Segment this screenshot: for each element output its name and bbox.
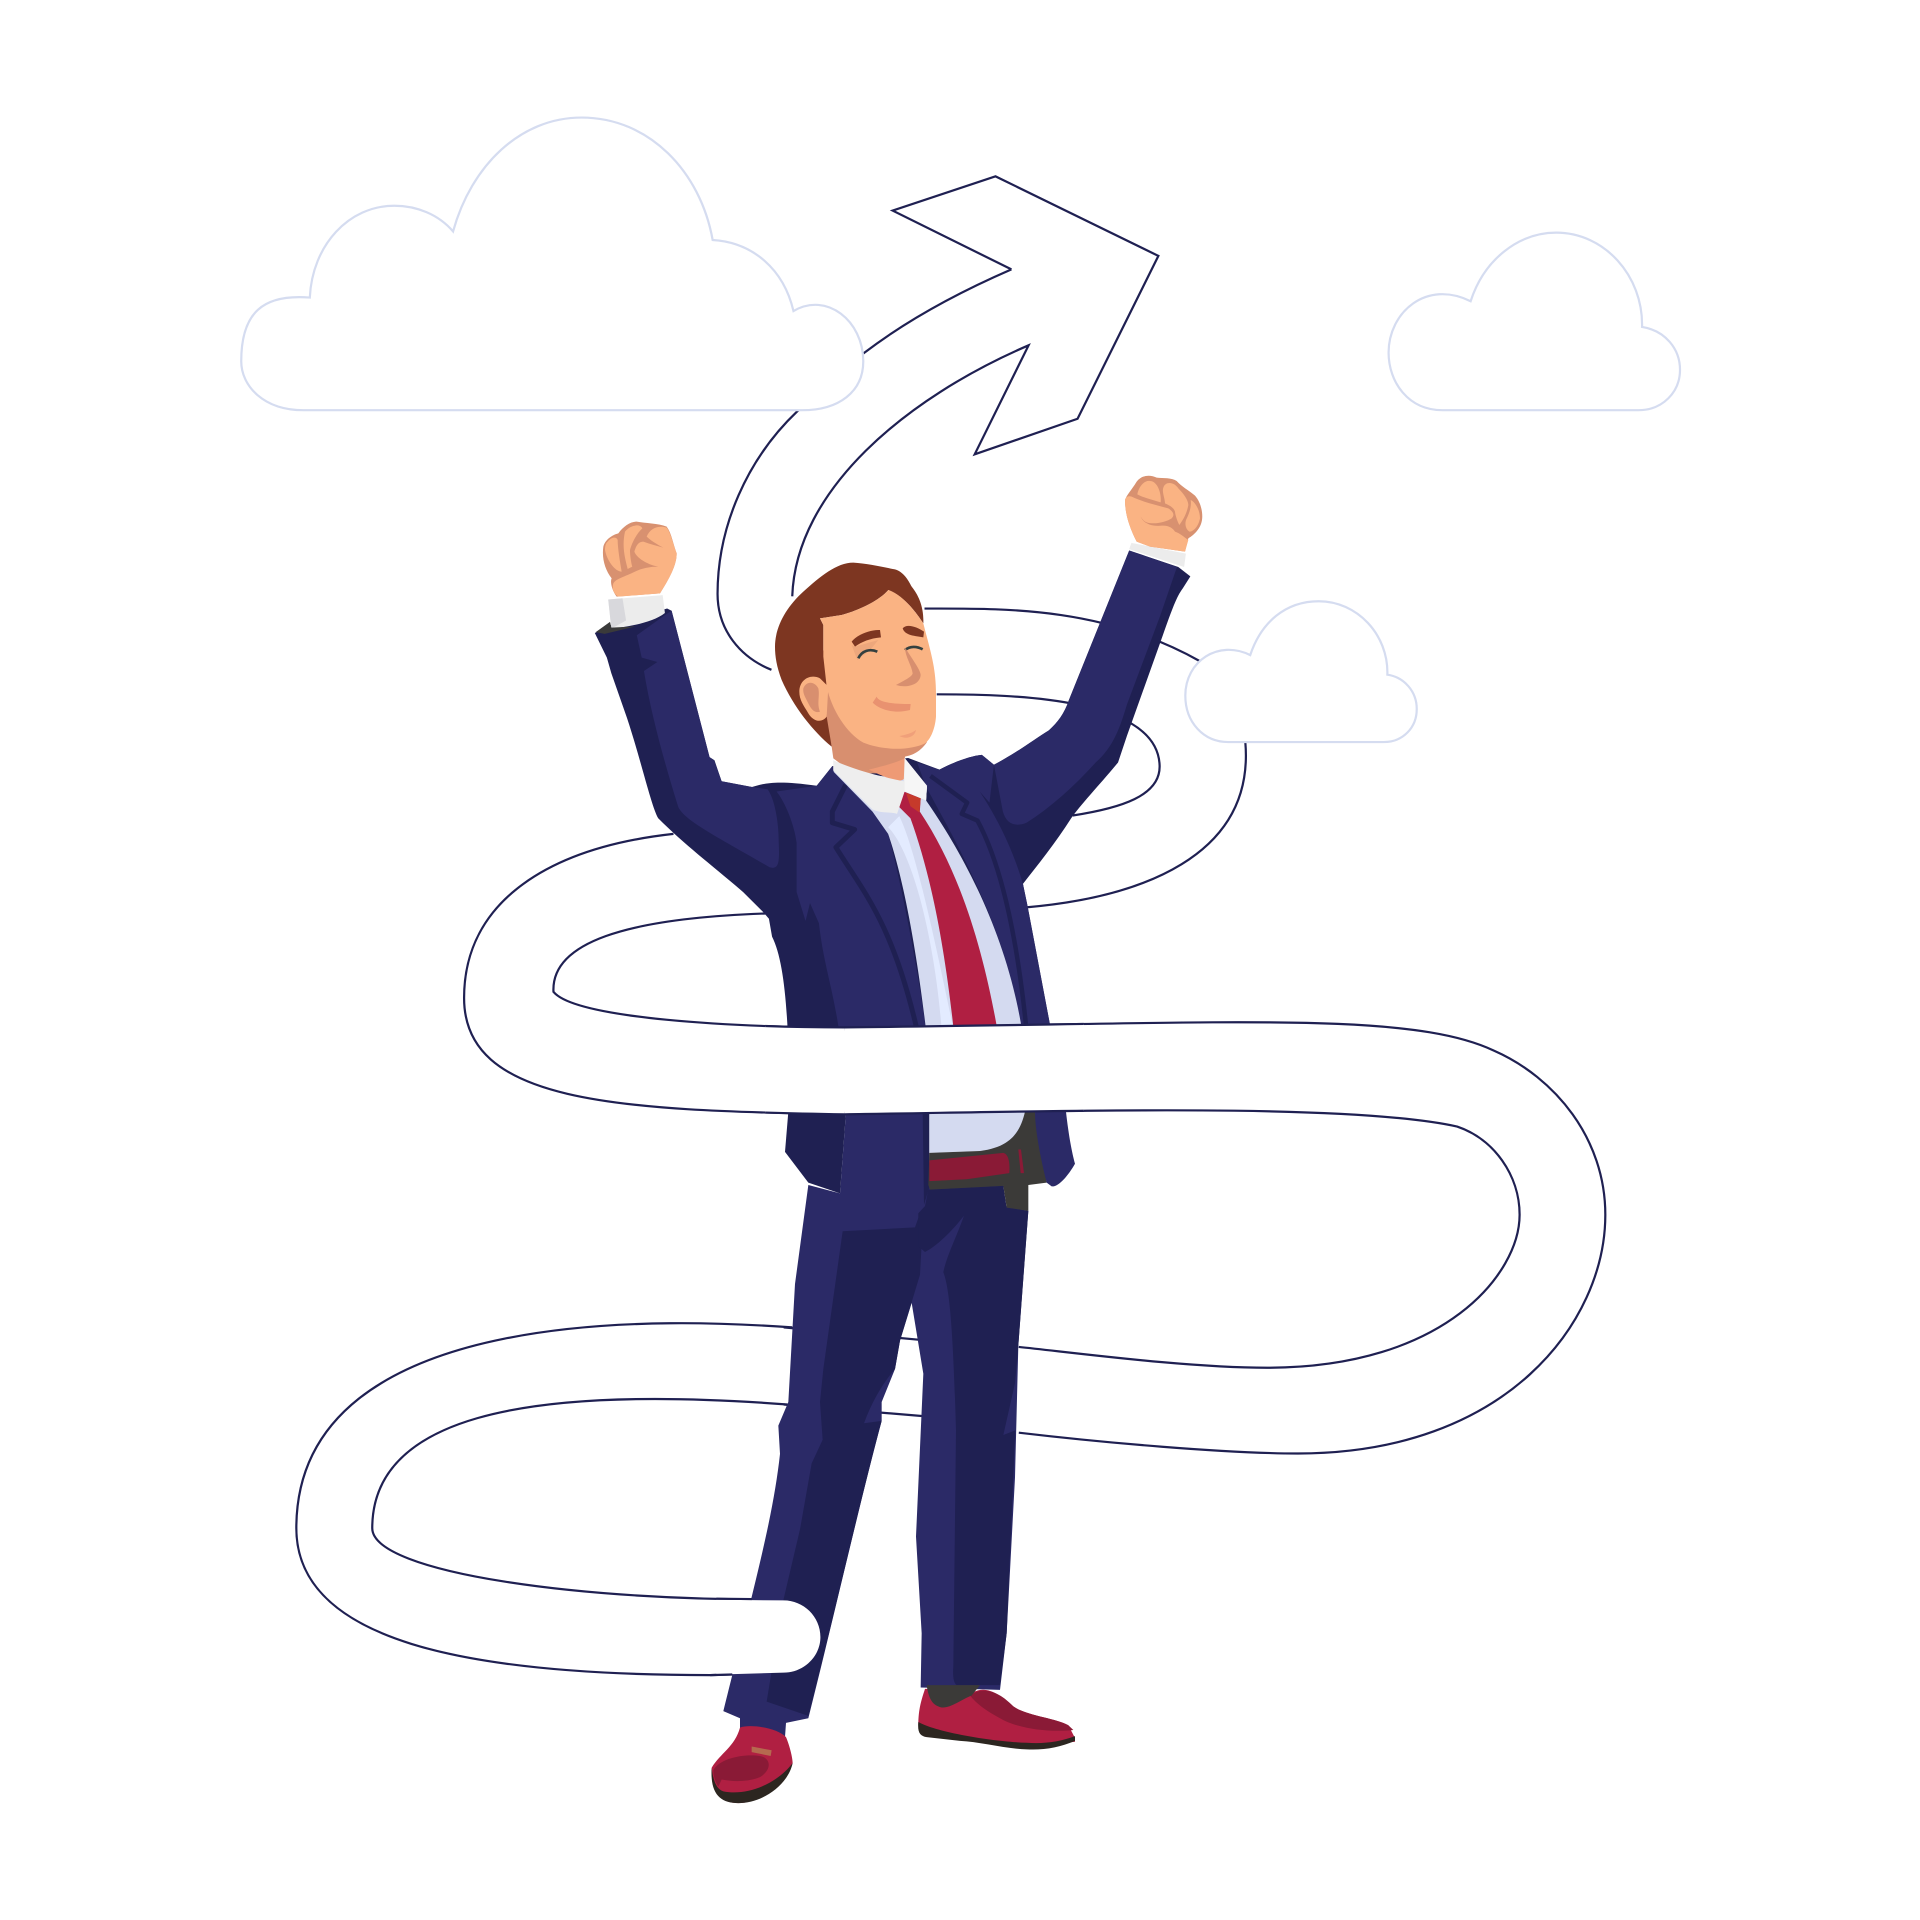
belt loop	[1018, 1150, 1024, 1173]
neck	[823, 685, 928, 773]
finger	[1137, 481, 1161, 502]
finger	[624, 525, 642, 569]
cuff shade	[608, 598, 626, 629]
shirt highlight	[888, 816, 954, 1030]
upper loop	[924, 609, 1246, 907]
inner loop	[937, 694, 1160, 816]
large cloud	[241, 118, 863, 410]
ear	[799, 677, 828, 721]
left cuff	[596, 595, 665, 634]
waist band	[765, 1022, 1084, 1116]
jacket hem shadow	[785, 1112, 846, 1193]
lower ribbon crossing the legs	[784, 1327, 931, 1417]
sock	[927, 1685, 980, 1708]
shirt	[833, 771, 1022, 1030]
palm	[1125, 496, 1188, 552]
band edges	[765, 1022, 1084, 1116]
band fill right	[845, 1024, 1084, 1114]
upper body	[595, 550, 1190, 1030]
finger	[1163, 483, 1188, 525]
mouth	[873, 697, 911, 712]
rounded ribbon end	[716, 1600, 820, 1675]
lower ribbon outer edge	[296, 1323, 792, 1675]
sleeve opening	[596, 622, 636, 634]
shoe shade	[713, 1755, 769, 1787]
right fist	[1125, 476, 1202, 552]
trousers	[723, 1112, 1028, 1737]
left lapel line	[832, 785, 917, 1030]
ribbon end bottom edge	[710, 1674, 732, 1676]
shoe sole	[918, 1722, 1075, 1750]
jacket front divider	[923, 1112, 929, 1205]
left leg shadow	[767, 1213, 923, 1716]
right eyebrow	[903, 626, 924, 637]
left jacket front	[777, 766, 926, 1030]
shoe upper	[712, 1726, 793, 1803]
finger	[1185, 500, 1200, 532]
waistband	[928, 1112, 1047, 1211]
cuff	[608, 595, 665, 629]
band fill left	[765, 1026, 845, 1114]
nose	[896, 647, 921, 686]
face	[820, 590, 936, 749]
collar right tip	[905, 758, 927, 800]
belt	[929, 1153, 1009, 1181]
tie	[897, 792, 998, 1030]
middle ribbon inner edge	[553, 913, 1605, 1453]
ribbon end top edge	[716, 1598, 752, 1600]
right lapel line	[931, 776, 1027, 1030]
lower body	[711, 1112, 1075, 1803]
right jacket front	[917, 755, 1051, 1030]
left fist	[603, 522, 677, 597]
right cuff	[1129, 543, 1186, 567]
fist shade	[1125, 476, 1202, 552]
left shoe	[711, 1726, 793, 1803]
fist shade	[603, 522, 677, 597]
closed eyes	[858, 647, 923, 658]
middle ribbon outer edge	[464, 834, 1520, 1368]
illustration	[240, 116, 1682, 1804]
left eyebrow	[852, 630, 881, 647]
right sleeve	[994, 550, 1177, 825]
finger	[605, 538, 622, 572]
outer shaft edge	[718, 269, 1011, 670]
shoe upper	[918, 1689, 1075, 1747]
collar and cuffs	[596, 543, 1186, 814]
businessman	[595, 476, 1202, 1803]
small cloud	[1185, 601, 1417, 742]
right leg shadow	[918, 1186, 1028, 1685]
winding arrow outline behind the man	[296, 176, 1605, 1675]
shoe patch	[752, 1747, 772, 1756]
ribbon passing in front of the man	[710, 1022, 1084, 1676]
inner ear	[803, 683, 820, 712]
shoe shade	[970, 1691, 1073, 1731]
clouds	[241, 118, 1680, 742]
hair	[775, 563, 923, 747]
head	[775, 563, 936, 773]
collar	[833, 758, 927, 814]
lower ribbon inner edge	[372, 1399, 787, 1599]
arrow head and upper shaft	[792, 176, 1158, 596]
palm	[613, 527, 677, 597]
left eye shade	[852, 640, 878, 660]
left sleeve	[637, 611, 779, 868]
jacket right hem	[1035, 1112, 1075, 1186]
neck edge	[869, 758, 905, 780]
right shoe	[918, 1685, 1075, 1750]
shirt	[929, 1112, 1025, 1153]
shoe sole	[711, 1763, 793, 1803]
jacket silhouette	[595, 550, 1190, 1030]
chin shade	[899, 730, 916, 738]
right cloud	[1389, 233, 1680, 410]
tie knot	[906, 793, 921, 813]
